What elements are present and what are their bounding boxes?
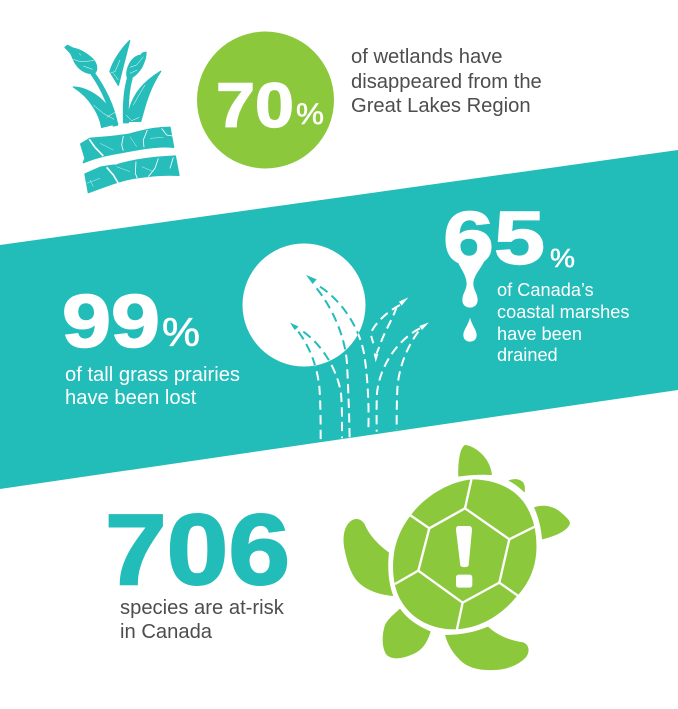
- icon: wetland plants: [65, 41, 179, 193]
- stat: 65% with drip: [443, 196, 575, 342]
- stat: 65% with drip: %: [550, 243, 575, 273]
- left flipper: [344, 519, 393, 596]
- stat: 99%: %: [162, 311, 200, 355]
- shell lines: [395, 478, 536, 631]
- stat: 99%: [62, 279, 240, 409]
- icon: white sun circle: [242, 244, 366, 366]
- text: wetlands stat: disappeared from the: [351, 71, 542, 93]
- stat: 65% with drip: 65: [443, 196, 545, 280]
- text: coastal marshes: have been: [497, 324, 582, 344]
- grass inside sun: [290, 275, 359, 366]
- text: wetlands stat: Great Lakes Region: [351, 95, 531, 117]
- icon: turtle: [344, 445, 570, 670]
- head: [458, 445, 492, 477]
- small tail bump: [508, 479, 525, 493]
- stat: 706: 706: [105, 494, 290, 606]
- text: wetlands stat: of wetlands have: [351, 46, 503, 68]
- text: species at risk: in Canada: [120, 621, 213, 643]
- stat circle: 70%: [197, 32, 334, 168]
- stat circle: 70%: %: [296, 98, 324, 131]
- text: coastal marshes: of Canada’s: [497, 280, 594, 300]
- text: coastal marshes: drained: [497, 345, 558, 365]
- stat: 99%: of tall grass prairies: [65, 364, 240, 386]
- stat: 99%: have been lost: [65, 387, 197, 409]
- icon: exclamation mark: [456, 526, 472, 588]
- lower right flipper: [445, 627, 529, 670]
- stat circle: 70%: 70: [216, 71, 294, 141]
- icon: water drop: [463, 318, 477, 342]
- teal diagonal band: [0, 150, 678, 489]
- front right flipper: [534, 506, 570, 539]
- text: species at risk: species are at-risk: [120, 597, 285, 619]
- shell: [393, 479, 536, 629]
- icon: drip from the 6: [458, 260, 485, 308]
- icon: dashed grass: [298, 287, 429, 442]
- lower left flipper: [383, 609, 431, 658]
- stat: 99%: 99: [62, 279, 160, 363]
- text: coastal marshes: coastal marshes: [497, 302, 629, 322]
